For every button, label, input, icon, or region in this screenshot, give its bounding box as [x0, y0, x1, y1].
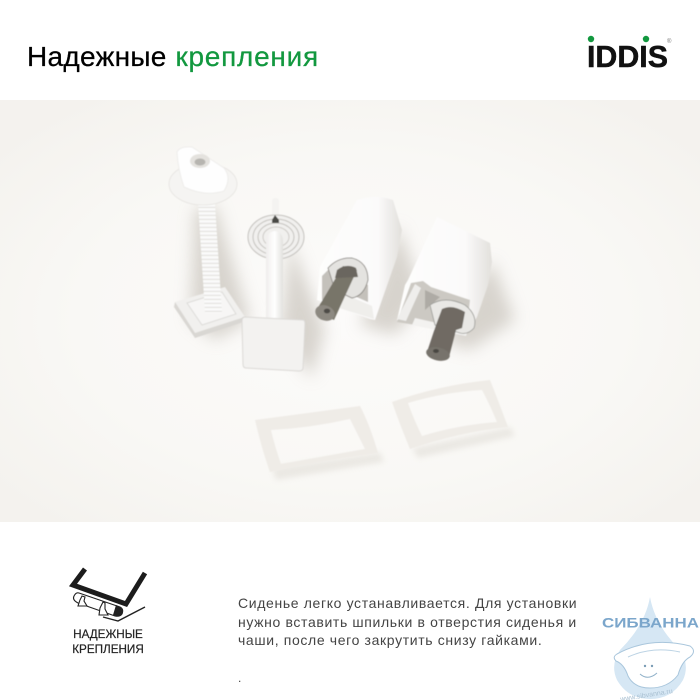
product photo: toilet seat fixings	[0, 100, 700, 522]
description text: Сиденье легко устанавливается. Для установки	[238, 595, 577, 611]
right hinge with grey pin	[397, 217, 492, 363]
bolt with ribbed disc and square head	[242, 198, 305, 371]
logo: IDDIS: IDDIS	[587, 39, 668, 74]
icon: fixings with seat hinge	[69, 568, 148, 622]
description text: нужно вставить шпильки в отверстия сиденья и	[238, 614, 577, 630]
watermark: Сибванна	[602, 598, 699, 700]
description text: чаши, после чего закрутить снизу гайками.	[238, 632, 542, 648]
description text	[238, 595, 577, 648]
title: Надежные крепления	[27, 41, 319, 72]
watermark: Сибванна: СИБВАННА	[602, 616, 699, 630]
left gasket	[255, 406, 378, 472]
stray dot: .	[238, 671, 241, 685]
bolt with wing knob	[169, 147, 246, 338]
logo: IDDIS: ®	[667, 38, 672, 45]
right gasket	[392, 380, 508, 449]
icon caption: НАДЕЖНЫЕ	[73, 628, 143, 641]
left hinge with grey pin	[313, 197, 402, 323]
icon caption: КРЕПЛЕНИЯ	[72, 643, 144, 656]
soft shadows	[190, 205, 515, 378]
icon caption	[72, 628, 144, 656]
